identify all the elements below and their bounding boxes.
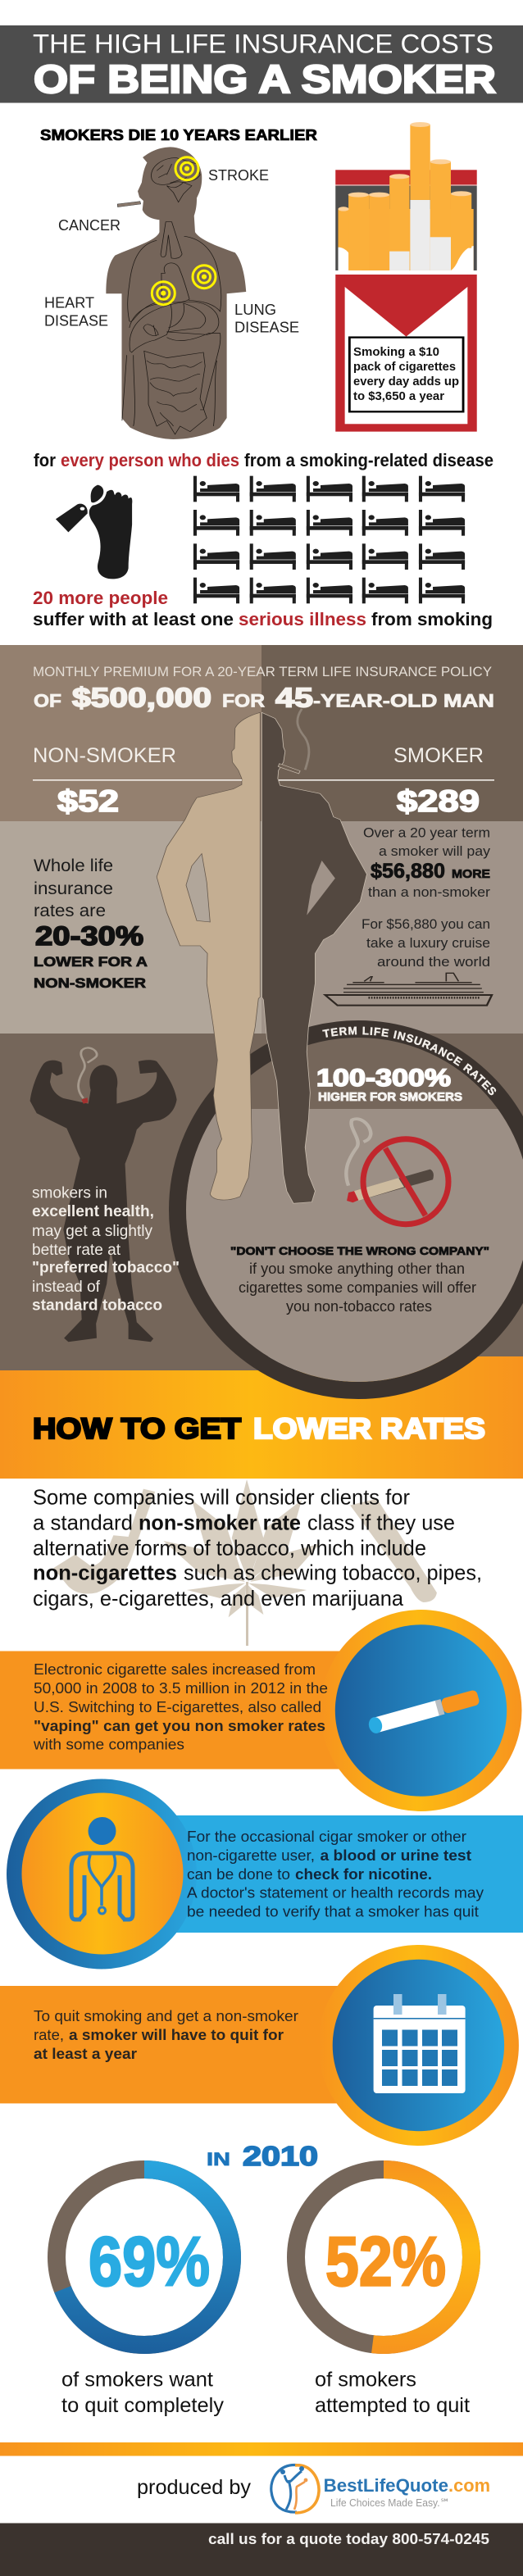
heading: of $500,000 for 45-year-old man: $500,000 [72, 683, 211, 713]
target: lung [193, 266, 216, 288]
blood test text: non-cigarette user, [187, 1847, 315, 1864]
text: whole life rates: Whole life [34, 856, 113, 875]
text: for every person who dies: from a smoking-related disease [244, 450, 493, 470]
pack text: pack of cigarettes [353, 360, 456, 374]
quit text [34, 2008, 298, 2062]
e-cigarette text [33, 1661, 328, 1753]
target: stroke [175, 157, 198, 180]
non-smoker label and price: NON-SMOKER [33, 744, 176, 767]
text: suffer with at least one serious illness: from smoking [371, 609, 493, 629]
text: smoker pays more: a smoker will pay [379, 843, 491, 859]
text: whole life rates: 20-30% [35, 921, 143, 951]
heading: of $500,000 for 45-year-old man [34, 683, 494, 713]
pack text: every day adds up [353, 375, 459, 388]
blood test text: be needed to verify that a smoker has quit [187, 1904, 479, 1920]
disease labels: LUNG [234, 302, 276, 318]
text: suffer with at least one serious illness [33, 609, 493, 629]
icon grid: twenty beds [193, 476, 465, 603]
disease labels: STROKE [208, 167, 269, 184]
text: smoker pays more [362, 825, 491, 970]
icon: calendar [374, 1994, 466, 2093]
logo mark [271, 2465, 319, 2513]
text: some companies will consider: Some companies will consider clients for [33, 1485, 410, 1510]
pack text [353, 345, 459, 403]
text: some companies will consider: a standard [33, 1511, 133, 1535]
logo: BestLifeQuote [271, 2465, 490, 2513]
blood test text [187, 1829, 484, 1920]
text: for every person who dies [34, 450, 493, 470]
text: whole life rates [34, 856, 148, 991]
logo: BestLifeQuote: .com [448, 2475, 490, 2496]
text: 20 more people: 20 more people [33, 588, 168, 608]
text: excellent health preferred tobacco: standard tobacco [32, 1297, 162, 1315]
heading: smokers die earlier: SMOKERS DIE 10 YEARS EARLIER [40, 127, 317, 143]
panel: e-cigarette [0, 1610, 521, 1811]
blood test text: For the occasional cigar smoker or other [187, 1829, 466, 1845]
caption: attempted to quit [315, 2369, 470, 2417]
title line 2: OF BEING A SMOKER [34, 58, 496, 102]
donut chart: 52% [296, 2169, 471, 2345]
text: whole life rates: NON-SMOKER [34, 975, 146, 991]
heading: how to get lower rates [33, 1413, 485, 1445]
stat: 100-300%: 100-300% [316, 1065, 451, 1092]
text: whole life rates: rates are [34, 902, 106, 920]
heading: of $500,000 for 45-year-old man: OF [34, 691, 61, 711]
e-cigarette text: "vaping" can get you non smoker rates [34, 1718, 325, 1734]
e-cigarette text: U.S. Switching to E-cigarettes, also called [34, 1699, 321, 1715]
donut chart: 69%: 69% [89, 2224, 210, 2301]
text: whole life rates: insurance [34, 879, 113, 898]
e-cigarette text: with some companies [33, 1737, 184, 1753]
icon: no smoking sign [346, 1119, 448, 1224]
illustration: muscular smoker silhouette [30, 1047, 177, 1342]
text: smoker pays more: MORE [452, 867, 490, 881]
text: excellent health preferred tobacco: better rate at [32, 1242, 121, 1259]
cigarette and smoke [278, 709, 309, 774]
caption: attempted to quit: attempted to quit [315, 2394, 470, 2417]
smoker label and price [279, 744, 494, 818]
heading: how to get lower rates: LOWER RATES [253, 1413, 485, 1445]
heading: of $500,000 for 45-year-old man: 45 [275, 683, 313, 713]
text: don't choose the wrong company [230, 1244, 489, 1315]
text: excellent health preferred tobacco: instead of [32, 1279, 101, 1296]
e-cigarette text: Electronic cigarette sales increased from [34, 1661, 316, 1678]
quit text: a smoker will have to quit for [69, 2027, 284, 2043]
blood test text: a blood or urine test [320, 1847, 471, 1864]
decorative watermark: pipe, leaf and cigar [53, 1479, 437, 1646]
non-smoker half [157, 712, 260, 1200]
logo tagline: Life Choices Made Easy.℠ [330, 2496, 450, 2509]
disease labels [44, 167, 299, 336]
heading: of $500,000 for 45-year-old man: FOR [222, 691, 265, 711]
quit text: rate, [34, 2027, 64, 2043]
stat: 100-300%: HIGHER FOR SMOKERS [318, 1091, 462, 1104]
non-smoker label and price: $52 [57, 784, 119, 818]
panel: quit for a year [0, 1945, 519, 2146]
caption: want to quit: to quit completely [61, 2394, 225, 2417]
icon: doctor with stethoscope [71, 1817, 133, 1920]
panel: blood or urine test [7, 1779, 523, 1969]
stat: 100-300% [316, 1065, 462, 1104]
disease labels: DISEASE [234, 320, 299, 336]
text: excellent health preferred tobacco: smokers in [32, 1185, 107, 1202]
blood test text: check for nicotine. [295, 1866, 432, 1883]
text: suffer with at least one serious illness: serious illness [239, 609, 366, 629]
heading: in 2010 [207, 2141, 318, 2171]
text: some companies will consider: cigars, e-cigarettes, and even marijuana [33, 1586, 404, 1611]
quit text: To quit smoking and get a non-smoker [34, 2008, 298, 2024]
pack text: to $3,650 a year [353, 389, 444, 403]
text: smoker pays more: Over a 20 year term [363, 825, 490, 841]
heading: monthly premium: MONTHLY PREMIUM FOR A 20-YEAR TERM LIFE INSURANCE POLICY [33, 664, 492, 679]
text: smoker pays more: For $56,880 you can [362, 916, 490, 932]
text: some companies will consider [33, 1485, 482, 1611]
text: smoker pays more: take a luxury cruise [366, 935, 490, 951]
icon: foot with toe tag [56, 485, 132, 579]
text: produced by: produced by [137, 2476, 251, 2499]
heading: of $500,000 for 45-year-old man: -YEAR-OLD MAN [313, 691, 494, 711]
text: smoker pays more: $56,880 [371, 860, 445, 883]
text: smoker pays more: around the world [377, 954, 490, 970]
anatomy figure with disease targets [106, 147, 246, 439]
text: excellent health preferred tobacco: may get a slightly [32, 1223, 152, 1240]
orange divider strip [0, 2442, 523, 2456]
text: suffer with at least one serious illness: suffer with at least one [33, 609, 234, 629]
non-smoker label and price [33, 744, 242, 818]
text: some companies will consider: non-smoker rate [139, 1511, 301, 1535]
panel: term life rates circle [177, 1029, 523, 1390]
disease labels: CANCER [58, 217, 121, 234]
text: some companies will consider: such as chewing tobacco, pipes, [184, 1560, 482, 1584]
disease labels: DISEASE [44, 313, 108, 329]
text: excellent health preferred tobacco: "preferred tobacco" [32, 1260, 180, 1277]
icon: cruise ship [325, 973, 492, 1006]
footer call to action: call us for a quote today 800-574-0245 [208, 2531, 489, 2547]
text: for every person who dies: for [34, 450, 56, 470]
panel: premium comparison backgrounds [0, 645, 523, 1370]
blood test text: A doctor's statement or health records may [187, 1885, 484, 1901]
text: some companies will consider: alternative forms of tobacco, which include [33, 1536, 426, 1561]
term life insurance rates curved label: TERM LIFE INSURANCE RATES [322, 1026, 497, 1095]
text: some companies will consider: class if they use [307, 1511, 455, 1535]
donut chart: 52%: 52% [325, 2224, 446, 2301]
text: whole life rates: LOWER FOR A [34, 954, 148, 970]
blood test text: can be done to [187, 1866, 290, 1883]
caption: attempted to quit: of smokers [315, 2369, 416, 2392]
heading: how to get lower rates: HOW TO GET [33, 1413, 241, 1445]
title line 1: THE HIGH LIFE INSURANCE COSTS [33, 30, 493, 59]
text: excellent health preferred tobacco [32, 1185, 180, 1315]
logo wordmark: BestLifeQuote [324, 2475, 448, 2496]
footer bar [0, 2523, 523, 2576]
title banner [0, 25, 523, 103]
text: smoker pays more: than a non-smoker [368, 884, 490, 900]
cigarette pack [335, 122, 477, 432]
icon: e-cigarette [367, 1689, 480, 1735]
donut chart: 69% [57, 2169, 232, 2345]
text: for every person who dies: every person who dies [61, 450, 239, 470]
illustration: split man silhouette [157, 709, 366, 1203]
heading: in 2010: 2010 [243, 2141, 318, 2171]
text: don't choose the wrong company: you non-tobacco rates [286, 1298, 432, 1315]
quit text: at least a year [34, 2046, 137, 2062]
e-cigarette text: 50,000 in 2008 to 3.5 million in 2012 in the [34, 1680, 328, 1697]
text: excellent health preferred tobacco: excellent health, [32, 1203, 154, 1220]
smoker label and price: SMOKER [393, 744, 484, 767]
target: heart [152, 282, 175, 305]
text: don't choose the wrong company: if you smoke anything other than [249, 1261, 465, 1277]
smoker half [262, 712, 366, 1203]
text: some companies will consider: non-cigarettes [33, 1560, 177, 1584]
heading: in 2010: IN [207, 2149, 230, 2169]
disease labels: HEART [44, 295, 94, 311]
caption: want to quit: of smokers want [61, 2369, 213, 2392]
pack text: Smoking a $10 [353, 345, 439, 359]
panel: how to get lower rates banner [0, 1356, 523, 1479]
text: don't choose the wrong company: "DON'T CHOOSE THE WRONG COMPANY" [230, 1244, 489, 1257]
caption: want to quit [61, 2369, 225, 2417]
text: don't choose the wrong company: cigarettes some companies will offer [239, 1279, 476, 1296]
smoker label and price: $289 [397, 784, 480, 818]
